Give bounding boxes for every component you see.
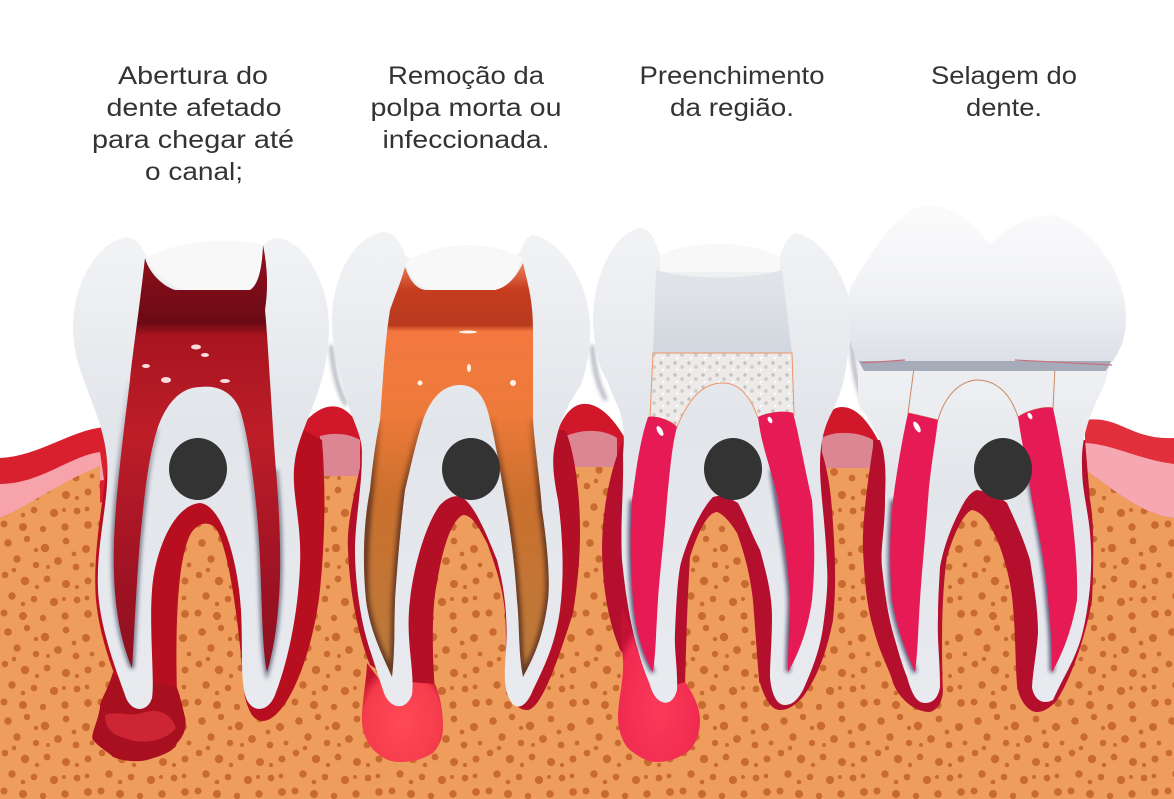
- back wall 3: [660, 244, 780, 272]
- step 2 text: [370, 62, 562, 154]
- abscess 1: [92, 672, 186, 761]
- filled canals: [631, 412, 814, 672]
- step 4 text: [931, 62, 1077, 122]
- tooth 3: filling: [593, 228, 852, 762]
- step 1 text: dente afetado: [106, 94, 282, 122]
- step 2 text: infeccionada.: [382, 126, 550, 154]
- porous layer: [650, 353, 794, 427]
- tooth body 1: [73, 237, 329, 709]
- tooth body 3: [593, 228, 852, 705]
- gum 3: [602, 440, 835, 710]
- step 3 text: [640, 62, 824, 122]
- pulp 1: [114, 245, 280, 672]
- bone arch 3: [685, 512, 760, 690]
- neck fill: [908, 368, 1055, 420]
- sealed canals: [890, 407, 1077, 672]
- back wall 2: [405, 245, 522, 290]
- bone arch 1: [176, 524, 245, 700]
- step 1 text: para chegar até: [92, 126, 294, 154]
- abscess 3: [618, 607, 700, 762]
- gum band: [0, 404, 1174, 566]
- step 4 text: Selagem do: [931, 62, 1077, 90]
- step 4 text: dente.: [966, 94, 1042, 122]
- bone arch 2: [433, 515, 506, 690]
- step 2 text: polpa morta ou: [370, 94, 562, 122]
- back wall 1: [146, 241, 263, 290]
- step 2 text: Remoção da: [388, 62, 544, 90]
- tooth body 4: [858, 340, 1112, 703]
- tooth 2: pulp removed: [332, 232, 590, 762]
- step 3 text: da região.: [670, 94, 794, 122]
- cleaned canals: [364, 263, 549, 677]
- abscess 2: [362, 663, 443, 762]
- bone arch 4: [942, 510, 1018, 695]
- gum 1: [95, 425, 324, 721]
- gum 4: [863, 440, 1093, 712]
- jawbone: [0, 460, 1174, 799]
- step 1 text: o canal;: [145, 158, 243, 186]
- tooth contact shadows: [331, 340, 866, 410]
- tooth 4: crowned tooth: [849, 205, 1126, 712]
- step 1 text: Abertura do: [118, 62, 268, 90]
- tooth 1: open tooth with infected pulp: [73, 237, 329, 761]
- step 3 text: Preenchimento: [640, 62, 824, 90]
- crown: [849, 205, 1126, 371]
- gum 2: [348, 430, 580, 710]
- step 1 text: [92, 62, 294, 186]
- black dots: [169, 438, 1032, 500]
- sealing block: [653, 270, 792, 353]
- tooth body 2: [332, 232, 590, 707]
